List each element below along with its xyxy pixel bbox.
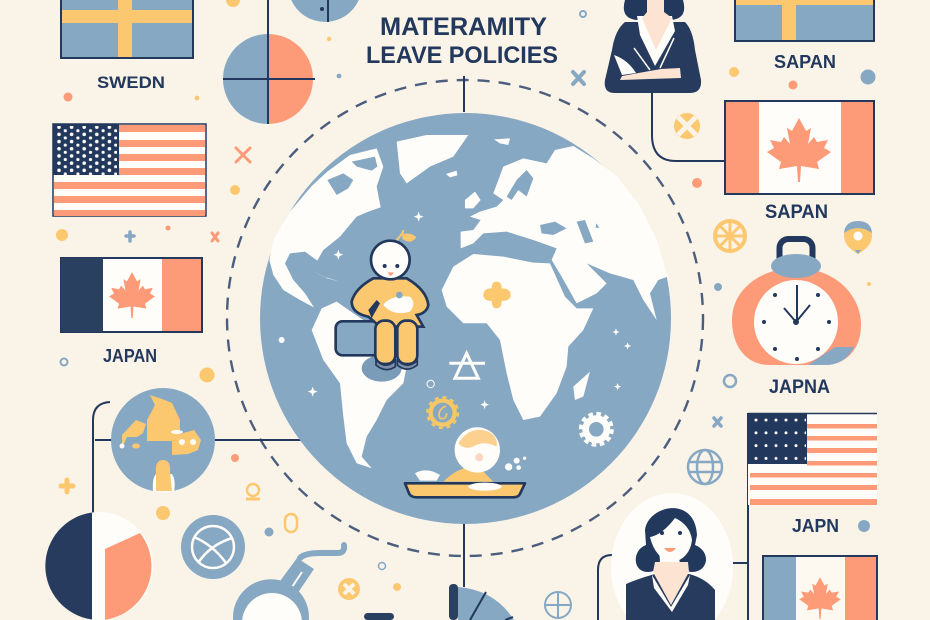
head [371,241,410,279]
mini globe, bottom left [111,388,215,492]
baby on tray [405,427,526,497]
label: SAPAN middle: SAPAN [765,202,828,223]
flag: canada, right [725,101,874,194]
half pie chart, bottom left [45,512,153,620]
portrait backdrop [611,493,733,620]
continent: africa [442,254,593,420]
tray [405,483,525,497]
title: MATERAMITY [380,13,547,41]
bubbles [505,457,526,471]
hair [636,508,706,572]
connector lines [93,0,748,620]
shadow [362,355,402,382]
legs [375,321,417,364]
globe with world map [260,113,671,524]
quartered pie chart, top left [223,34,315,124]
plus icon on africa [483,282,511,308]
island: madagascar [573,372,590,400]
cross marks [126,72,721,426]
continent: north america [269,148,383,307]
flag: usa, left [53,124,206,216]
label: SAPAN top: SAPAN [774,52,836,72]
label: JAPAN: JAPAN [103,346,157,366]
baby head [455,427,500,473]
continent: south america [312,302,407,468]
globe network globe icon, right [688,450,722,484]
globe triangle icon [449,353,485,378]
dashed orbit ring [227,80,703,556]
gear icon: white [581,414,612,445]
baby silhouette in mini globe [153,474,175,492]
location pin icon [844,221,872,254]
island: iceland and svalbard [446,138,510,177]
swaddled baby [383,296,413,313]
continent: british isles [465,192,481,208]
flag: usa, right [748,413,877,505]
inland seas [507,170,599,243]
flag: sweden, top right [735,0,874,41]
hair sprout [397,230,415,241]
ring and small icons [60,11,736,570]
continent: eurasia [461,146,668,320]
partial circle, top [291,0,359,22]
seated parent figure with briefcase [336,230,428,382]
globe sparkles [308,212,631,409]
face [650,518,692,563]
label: JAPN: JAPN [792,516,839,536]
clock [732,239,861,365]
small globe icon, bottom [545,592,571,618]
baby body [443,466,493,482]
title [366,13,558,69]
partial pie chart, bottom centre [364,584,514,620]
gear icon: yellow [427,397,458,428]
woman portrait, bottom [611,493,733,620]
flag: sweden, top left [61,0,193,58]
jacket [626,574,715,620]
puzzle icons [338,113,700,600]
woman portrait, top [605,0,701,93]
torso and arms [352,278,428,327]
label: SWEDN: SWEDN [97,73,165,92]
hudson bay and arctic channels [327,157,377,195]
title: LEAVE POLICIES [366,42,558,69]
label: JAPNA: JAPNA [769,377,830,398]
flag: tricolour, bottom right [763,556,877,620]
flask icon [233,545,344,620]
wheel icon, right [715,221,745,251]
globe ring icon [427,380,434,388]
collar strap [368,300,380,318]
continent: greenland [397,135,468,183]
flag: tricolour with leaf, left [61,258,202,332]
briefcase [336,321,379,355]
circular icon, bottom left [181,515,245,579]
